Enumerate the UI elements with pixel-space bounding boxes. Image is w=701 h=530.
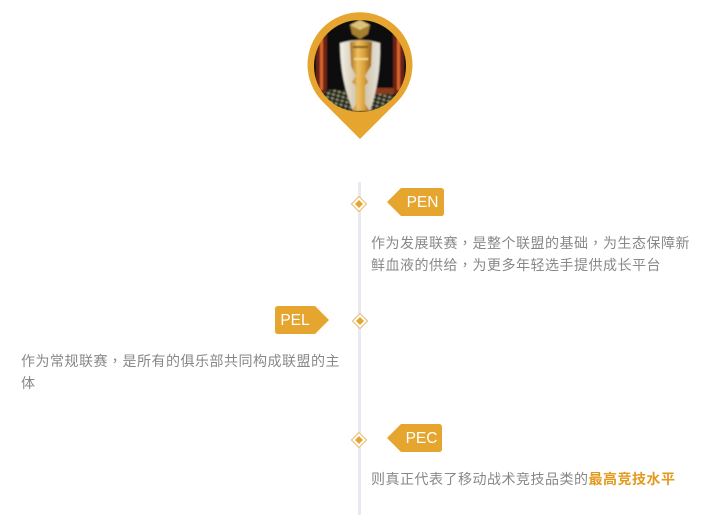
tag: PEL [275,306,329,334]
timeline node: PEL [352,312,368,330]
tag: PEC [387,424,442,452]
timeline axis [358,182,361,515]
tag: PEN [387,188,444,216]
trophy photo [314,20,406,112]
description: PEN: 作为发展联赛，是整个联盟的基础，为生态保障新鲜血液的供给，为更多年轻选手提供成长平台 [371,233,690,275]
text: PEN [407,194,438,211]
text: PEL [280,312,310,329]
text: PEC [406,430,437,447]
pin shape [308,12,413,139]
pin icon: trophy medallion [308,12,412,139]
description: PEL: 作为常规联赛，是所有的俱乐部共同构成联盟的主体 [21,351,340,391]
timeline node: PEN [350,196,368,212]
timeline node: PEC [350,432,368,448]
description: PEC: 则真正代表了移动战术竞技品类的最高竞技水平 [371,471,676,487]
